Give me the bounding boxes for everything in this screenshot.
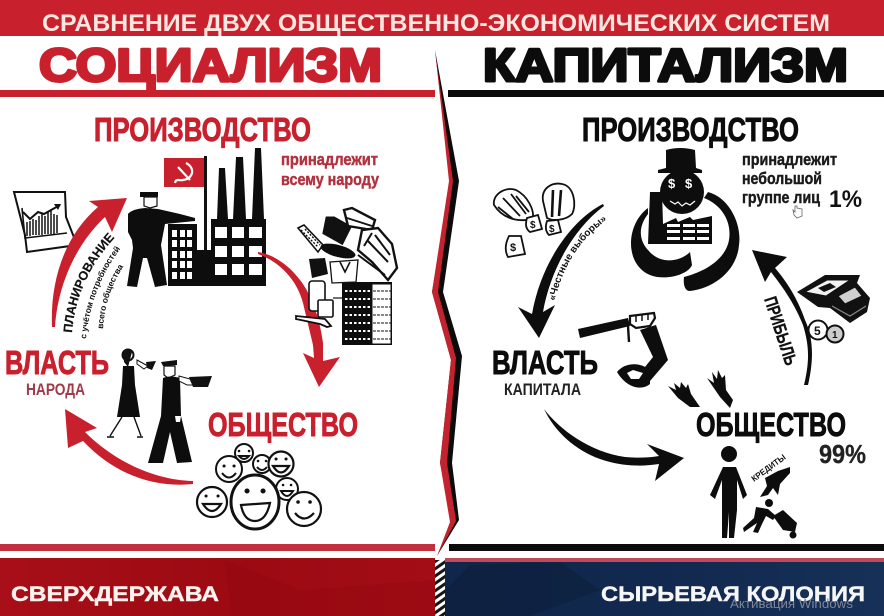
- icon: hands and money bags: $: [510, 242, 516, 254]
- arrow: profit up to production: [752, 250, 812, 385]
- heading: production: ПРОИЗВОДСТВО: [582, 111, 799, 148]
- text: belongs to all the people: принадлежит: [281, 150, 378, 169]
- icon: capitalist factory with hat: $: [668, 176, 676, 191]
- icon: pile of consumer goods and building: [296, 208, 397, 345]
- icon: man with bowl: [148, 360, 212, 463]
- icon: hands and money bags: $: [549, 224, 555, 235]
- divider: jagged red and black line: [432, 50, 462, 556]
- heading: socialism: СОЦИАЛИЗМ: [39, 39, 382, 91]
- arrow: honest elections down to power: [518, 204, 604, 338]
- arrow: production to society: [258, 252, 340, 387]
- arrow: power to society: [544, 409, 684, 481]
- text: of the people: НАРОДА: [26, 381, 85, 399]
- heading: power: ВЛАСТЬ: [5, 344, 109, 381]
- icon: capitalist factory with hat: $: [685, 176, 693, 191]
- text: profit: ПРИБЫЛЬ: [760, 294, 801, 368]
- icon: money stacks and coins: 5: [814, 324, 821, 338]
- icon: hands and money bags: [494, 184, 574, 257]
- heading: power: ВЛАСТЬ: [492, 344, 598, 381]
- arrow: society to power: [65, 409, 193, 485]
- text: planning label: с учётом потребностей: [82, 246, 120, 338]
- text: belongs to a small group: принадлежит: [742, 150, 837, 169]
- icon: factory: [168, 148, 266, 286]
- icon: hands and money bags: $: [530, 220, 536, 231]
- icon: man carrying credits: [749, 452, 790, 497]
- text: 1 percent: 1%: [829, 186, 862, 213]
- text: planning label: всего общества: [98, 265, 124, 328]
- header band: [0, 0, 884, 37]
- heading: society: ОБЩЕСТВО: [208, 406, 358, 443]
- icon: poor stick man with empty pockets: [710, 446, 747, 538]
- icon: growth chart: [14, 192, 77, 252]
- icon: capitalist factory with hat: [631, 148, 739, 291]
- text: belongs to a small group: [742, 150, 837, 207]
- text: of capital: КАПИТАЛА: [504, 381, 581, 399]
- panel: capitalism: [448, 39, 884, 538]
- panel: socialism: [0, 39, 435, 530]
- text: belongs to a small group: небольшой: [742, 169, 822, 188]
- heading: capitalism: КАПИТАЛИЗМ: [483, 39, 848, 91]
- text: belongs to a small group: группе лиц: [742, 188, 820, 207]
- header title: СРАВНЕНИЕ ДВУХ ОБЩЕСТВЕННО-ЭКОНОМИЧЕСКИХ СИСТЕМ: [42, 10, 830, 37]
- footer: raw-material colony: [445, 558, 884, 616]
- text: belongs to all the people: [281, 150, 379, 189]
- hatched divider strip: [435, 560, 445, 616]
- icon: cursor hand: [793, 206, 802, 218]
- footer lines: [0, 544, 884, 551]
- watermark: Активация Windows: [730, 596, 854, 611]
- text: honest elections: «Честные выборы»: [550, 217, 606, 300]
- icon: red flag with hammer and sickle: [164, 156, 207, 256]
- icon: arm with baton over open mouth: [578, 313, 668, 388]
- arrow: planning up to production: [52, 198, 127, 327]
- icon: crowd of happy smileys: [197, 444, 321, 529]
- footer label: superpower: СВЕРХДЕРЖАВА: [11, 583, 219, 606]
- icon: man pushing wheelbarrow: [743, 499, 797, 538]
- icon: reaching hands: [668, 370, 733, 408]
- text: belongs to all the people: всему народу: [281, 170, 379, 189]
- text: 99 percent: 99%: [819, 439, 866, 469]
- icon: money stacks and coins: 1: [832, 330, 838, 341]
- footer label: raw-material colony: СЫРЬЕВАЯ КОЛОНИЯ: [601, 583, 865, 606]
- heading: production: ПРОИЗВОДСТВО: [94, 111, 311, 148]
- footer: superpower: [0, 558, 435, 616]
- icon: worker pointing: [127, 192, 195, 287]
- icon: man carrying credits: КРЕДИТЫ: [749, 452, 788, 484]
- icon: woman with bowl: [107, 349, 156, 437]
- text: planning label: ПЛАНИРОВАНИЕ: [63, 232, 114, 332]
- icon: money stacks and coins: [797, 275, 870, 342]
